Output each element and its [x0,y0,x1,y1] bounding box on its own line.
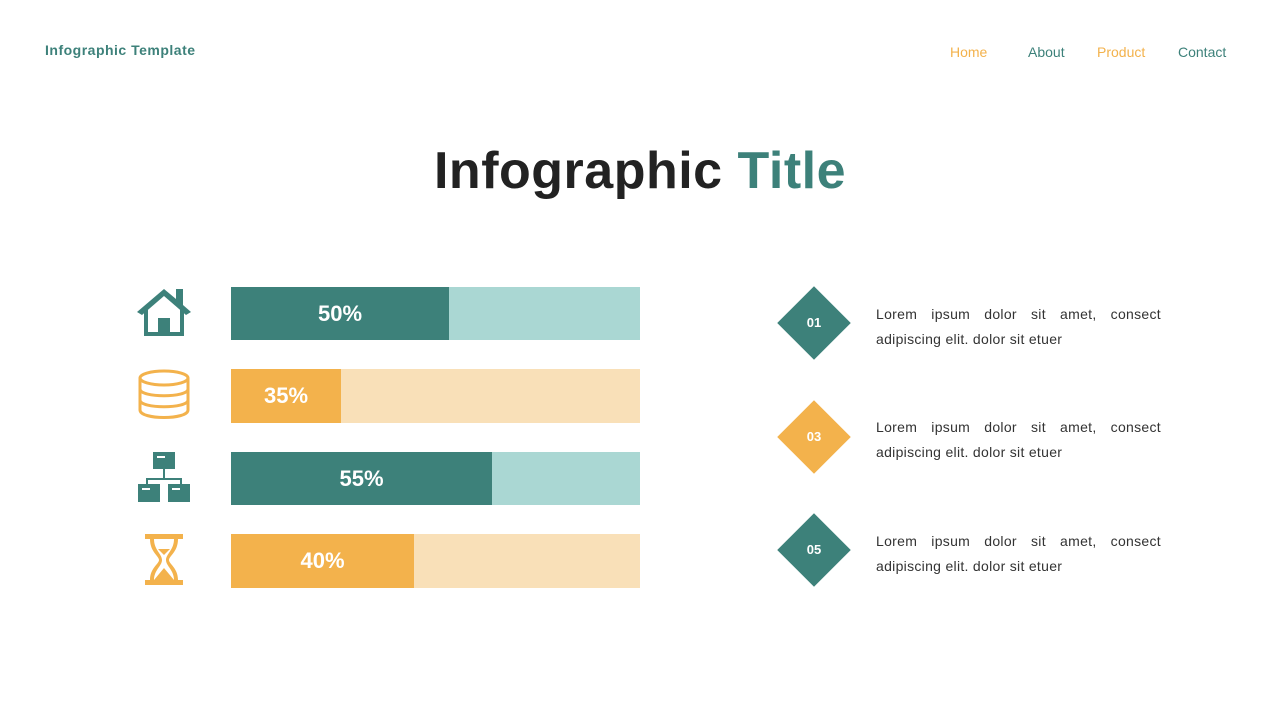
bar 35% [231,369,640,423]
bar 40%: 40% [300,548,345,573]
diamond 05: 05 [807,542,821,557]
diamond 03: 03 [807,429,821,444]
diamond 01: 01 [807,315,821,330]
title: Infographic Title [434,142,846,200]
icon: hourglass [145,534,183,585]
icon: database [138,370,190,419]
brand: Infographic Template [45,42,196,58]
icon: network [138,452,190,502]
nav: Product [1097,44,1145,60]
icon: house [137,289,191,336]
bar 35%: 35% [264,383,308,408]
nav: Contact [1178,44,1226,60]
text 03: Lorem ipsum dolor sit amet, consect adipiscing elit. dolor sit etuer [876,419,1161,460]
nav: About [1028,44,1065,60]
diamond 05 [777,513,851,587]
bar 50% [231,287,640,340]
nav: Home [950,44,987,60]
text 01: Lorem ipsum dolor sit amet, consect adipiscing elit. dolor sit etuer [876,306,1161,347]
nav [950,44,1226,60]
text 05: Lorem ipsum dolor sit amet, consect adipiscing elit. dolor sit etuer [876,533,1161,574]
diamond 03 [777,400,851,474]
bar 55% [231,452,640,505]
diamond 01 [777,286,851,360]
bar 40% [231,534,640,588]
bar 55%: 55% [339,466,384,490]
bar 50%: 50% [318,300,362,326]
